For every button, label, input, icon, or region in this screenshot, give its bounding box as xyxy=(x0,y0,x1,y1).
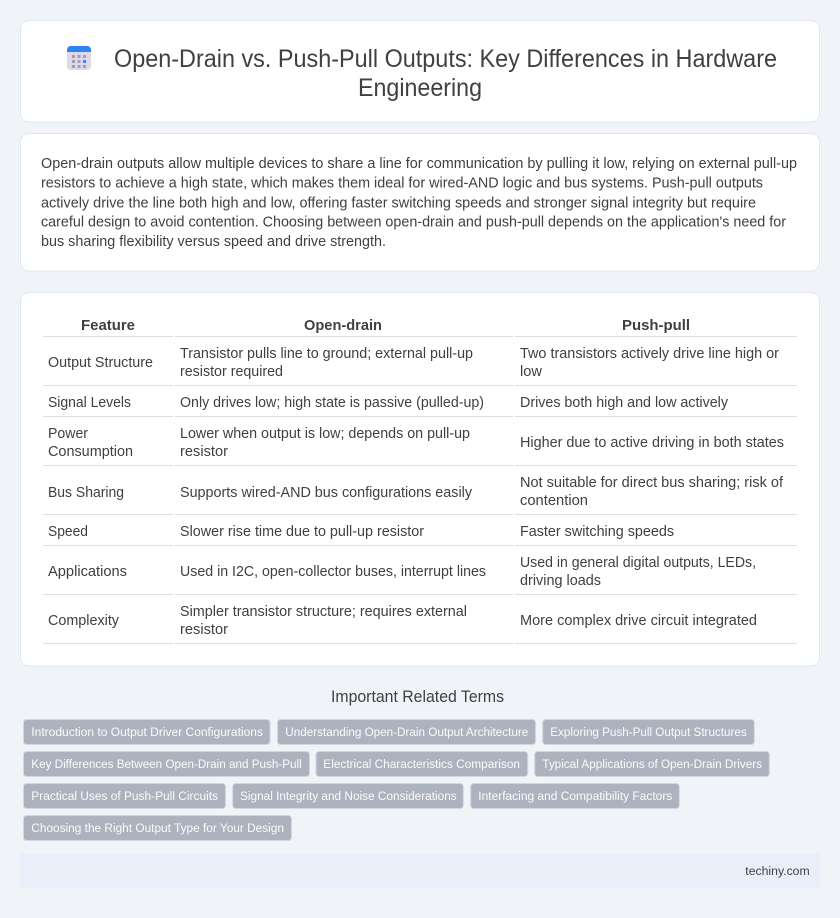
chip xyxy=(233,784,463,808)
table row: output structure: resistor required xyxy=(180,364,283,380)
table row: bus sharing: contention xyxy=(520,493,588,509)
table row: applications: Applications xyxy=(48,564,127,580)
chip: Practical Uses of Push-Pull Circuits xyxy=(31,789,218,803)
chip xyxy=(24,752,310,776)
table row: signal levels: Only drives low; high state is passive (pulled-up) xyxy=(180,395,484,411)
chip: Understanding Open-Drain Output Architecture xyxy=(285,725,528,739)
chip xyxy=(24,720,270,744)
table row: output structure xyxy=(43,346,797,386)
text block: introduction xyxy=(41,156,797,250)
table row: power consumption xyxy=(43,426,797,466)
table row: speed: Faster switching speeds xyxy=(520,524,674,540)
chip xyxy=(24,816,292,840)
text block: introduction: bus sharing flexibility versus speed and drive strength. xyxy=(41,234,386,250)
table row: applications: Used in I2C, open-collector buses, interrupt lines xyxy=(180,564,486,580)
title xyxy=(114,46,777,102)
text block: introduction: resistors to achieve a high state, which makes them ideal for wired-AND logic and bus systems. Push-pull outputs xyxy=(41,176,763,192)
table row: power consumption: Power xyxy=(48,426,88,442)
footer: techiny.com xyxy=(745,864,810,878)
table row: output structure: low xyxy=(520,364,543,380)
chip: Typical Applications of Open-Drain Drivers xyxy=(542,757,762,771)
table row: complexity xyxy=(43,604,797,644)
chip xyxy=(535,752,769,776)
table row: power consumption: resistor xyxy=(180,444,228,460)
table header row: Feature xyxy=(81,317,135,334)
table row: power consumption: Consumption xyxy=(48,444,133,460)
chip xyxy=(316,752,528,776)
chip: Choosing the Right Output Type for Your Design xyxy=(31,821,284,835)
title: Open-Drain vs. Push-Pull Outputs: Key Differences in Hardware xyxy=(114,46,777,73)
table row: applications xyxy=(43,555,797,595)
table row: complexity: resistor xyxy=(180,622,228,638)
panel: title header xyxy=(20,20,820,122)
footer xyxy=(20,854,820,888)
text block: introduction: Open-drain outputs allow multiple devices to share a line for communication by pulling it low, relying on external pull-up xyxy=(41,156,797,172)
chip xyxy=(543,720,754,744)
panel: intro paragraph xyxy=(20,134,820,271)
panel: related term chips xyxy=(24,720,769,840)
table row: bus sharing: Bus Sharing xyxy=(48,485,124,501)
table row: output structure: Transistor pulls line to ground; external pull-up xyxy=(180,346,473,362)
chip: Key Differences Between Open-Drain and Push-Pull xyxy=(31,757,302,771)
table row: complexity: Simpler transistor structure; requires external xyxy=(180,604,467,620)
chip: Signal Integrity and Noise Considerations xyxy=(240,789,457,803)
table header row: Open-drain xyxy=(304,317,382,334)
table row: complexity: More complex drive circuit integrated xyxy=(520,613,757,629)
table row: bus sharing: Not suitable for direct bus sharing; risk of xyxy=(520,475,784,491)
chip xyxy=(471,784,679,808)
icon: calendar xyxy=(67,46,91,70)
table row: output structure: Two transistors actively drive line high or xyxy=(520,346,779,362)
table row: signal levels: Drives both high and low actively xyxy=(520,395,729,411)
text block: introduction: actively drive the line both high and low, offering faster switching speeds and stronger signal integrity but require xyxy=(41,196,756,212)
table row: complexity: Complexity xyxy=(48,613,120,629)
table row: speed: Speed xyxy=(48,524,88,540)
chip xyxy=(24,784,226,808)
table row: power consumption: Lower when output is low; depends on pull-up xyxy=(180,426,470,442)
table row: applications: Used in general digital outputs, LEDs, xyxy=(520,555,756,571)
table row: signal levels: Signal Levels xyxy=(48,395,131,411)
table row: signal levels xyxy=(43,395,797,417)
title: Engineering xyxy=(358,75,482,102)
table row: output structure: Output Structure xyxy=(48,355,153,371)
table row: speed: Slower rise time due to pull-up resistor xyxy=(180,524,424,540)
table header row: Push-pull xyxy=(622,317,690,334)
table row: bus sharing: Supports wired-AND bus configurations easily xyxy=(180,485,473,501)
chip: Interfacing and Compatibility Factors xyxy=(478,789,672,803)
chip: Exploring Push-Pull Output Structures xyxy=(550,725,747,739)
heading: important related terms: Important Related Terms xyxy=(331,688,504,706)
text block: introduction: careful design to avoid contention. Choosing between open-drain and push-pull depends on the application's need for xyxy=(41,214,786,230)
chip: Electrical Characteristics Comparison xyxy=(323,757,520,771)
panel: comparison table xyxy=(20,292,820,666)
table row: power consumption: Higher due to active driving in both states xyxy=(520,435,784,451)
chip xyxy=(278,720,536,744)
chip: Introduction to Output Driver Configurations xyxy=(31,725,263,739)
table row: bus sharing xyxy=(43,475,797,515)
table header row xyxy=(43,317,797,337)
table row: applications: driving loads xyxy=(520,573,601,589)
table row: speed xyxy=(43,524,797,546)
